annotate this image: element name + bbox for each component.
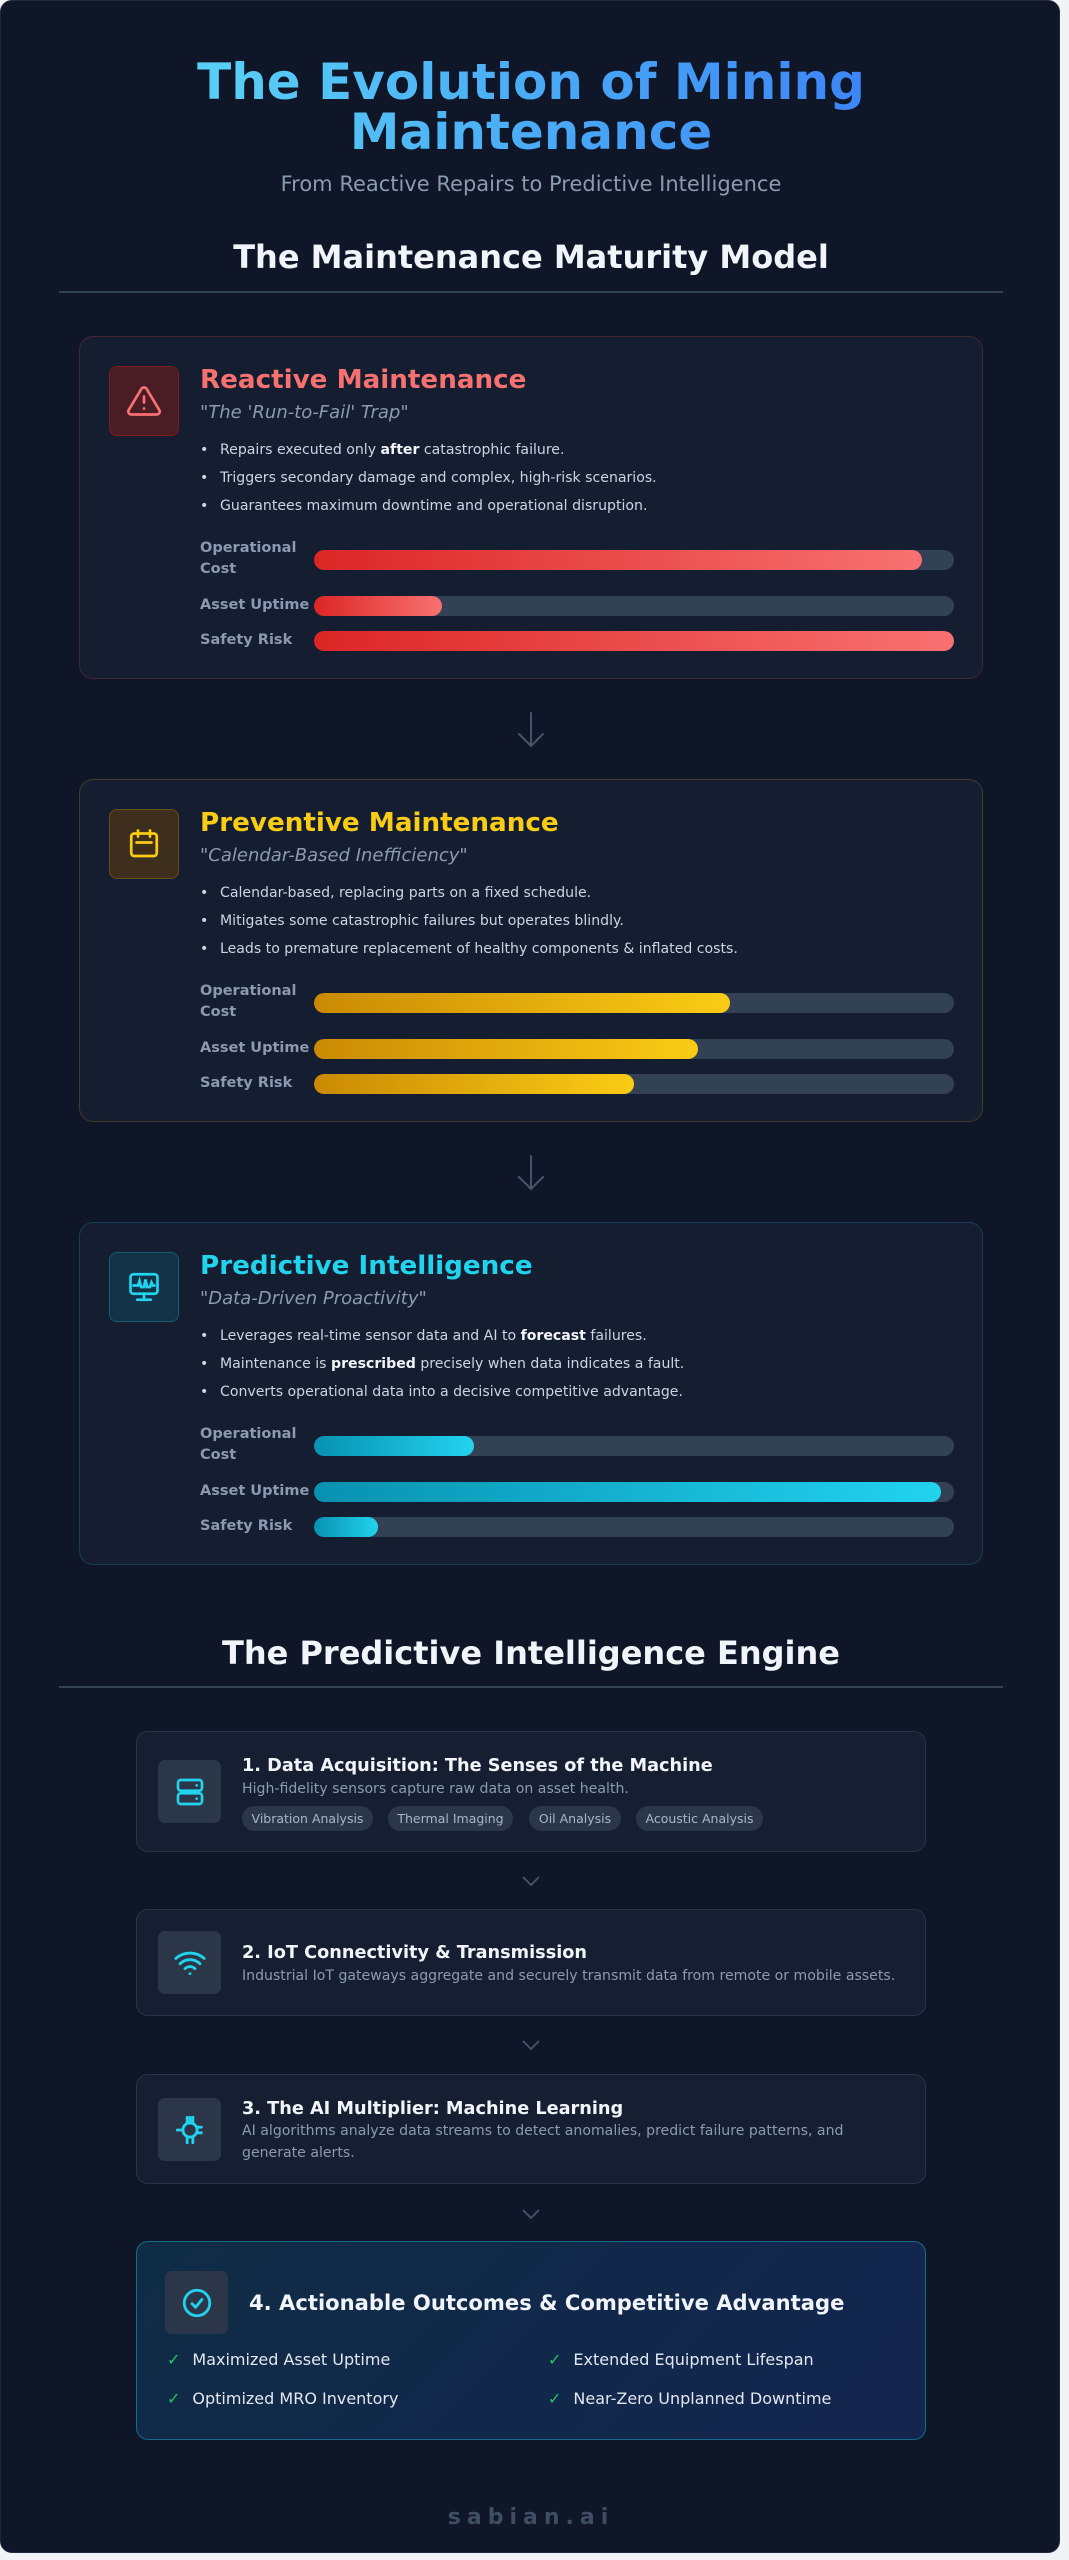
card title: Preventive Maintenance: [200, 808, 559, 838]
step text: High-fidelity sensors capture raw data on asset health.: [242, 1781, 629, 1797]
icon: chip: [158, 2098, 221, 2161]
step title: 3. The AI Multiplier: Machine Learning: [242, 2099, 623, 2119]
bullets: Mitigates some catastrophic failures but operates blindly.: [220, 913, 624, 929]
tags: Thermal Imaging: [397, 1811, 504, 1826]
bullets: Triggers secondary damage and complex, high-risk scenarios.: [220, 470, 657, 486]
bar chart: Safety Risk: [200, 632, 292, 648]
step 3: ai: [136, 2074, 926, 2184]
bar chart: Cost: [200, 561, 236, 577]
chevron: [522, 2040, 540, 2050]
step title: 1. Data Acquisition: The Senses of the Machine: [242, 1756, 713, 1776]
heading: engine: The Predictive Intelligence Engine: [222, 1634, 840, 1672]
panel: preventive maintenance: [79, 779, 983, 1122]
bar chart: [200, 1426, 954, 1537]
bar chart: [200, 540, 954, 651]
bullets: Calendar-based, replacing parts on a fixed schedule.: [220, 885, 591, 901]
tags: Acoustic Analysis: [645, 1811, 754, 1826]
card title: Predictive Intelligence: [200, 1251, 533, 1281]
bullets: Guarantees maximum downtime and operational disruption.: [220, 498, 647, 514]
arrow: [518, 1155, 544, 1190]
card subtitle: "Data-Driven Proactivity": [200, 1288, 427, 1309]
icon: warning: [109, 366, 179, 436]
step text: Industrial IoT gateways aggregate and securely transmit data from remote or mobile assets.: [242, 1968, 895, 1984]
title: The Evolution of Mining Maintenance: [197, 53, 865, 161]
step title: 4. Actionable Outcomes & Competitive Advantage: [249, 2290, 844, 2315]
icon: server: [158, 1760, 221, 1823]
bar chart: Operational: [200, 540, 296, 556]
outcomes list: ✓ Maximized Asset Uptime: [167, 2350, 390, 2369]
bar chart: Asset Uptime: [200, 1040, 309, 1056]
card subtitle: "The 'Run-to-Fail' Trap": [200, 402, 409, 423]
card title: Reactive Maintenance: [200, 365, 526, 395]
bar chart: Cost: [200, 1447, 236, 1463]
icon: wifi: [158, 1931, 221, 1994]
card subtitle: "Calendar-Based Inefficiency": [200, 845, 468, 866]
step title: 2. IoT Connectivity & Transmission: [242, 1943, 587, 1963]
tags: Oil Analysis: [539, 1811, 611, 1826]
arrow: [518, 712, 544, 748]
outcomes list: [167, 2350, 831, 2408]
bar chart: Asset Uptime: [200, 597, 309, 613]
bullets: [202, 885, 738, 957]
bullets: Leverages real-time sensor data and AI to forecast failures.: [220, 1328, 647, 1344]
subtitle: From Reactive Repairs to Predictive Intelligence: [281, 172, 781, 196]
step 4: outcomes: [136, 2241, 926, 2440]
bullets: Repairs executed only after catastrophic failure.: [220, 442, 564, 458]
bar chart: Asset Uptime: [200, 1483, 309, 1499]
bar chart: Operational: [200, 1426, 296, 1442]
icon: monitor: [109, 1252, 179, 1322]
step 1: data acquisition: [136, 1731, 926, 1852]
bar chart: Operational: [200, 983, 296, 999]
outcomes list: ✓ Near-Zero Unplanned Downtime: [548, 2389, 831, 2408]
tags: Vibration Analysis: [252, 1811, 363, 1826]
panel: predictive intelligence: [79, 1222, 983, 1565]
outcomes list: ✓ Extended Equipment Lifespan: [548, 2350, 814, 2369]
bullets: Leads to premature replacement of healthy components & inflated costs.: [220, 941, 738, 957]
step 2: iot: [136, 1909, 926, 2016]
step text: AI algorithms analyze data streams to detect anomalies, predict failure patterns, and generate alerts.: [242, 2123, 843, 2161]
bar chart: Cost: [200, 1004, 236, 1020]
panel: reactive maintenance: [79, 336, 983, 679]
bullets: Maintenance is prescribed precisely when data indicates a fault.: [220, 1356, 684, 1372]
heading: maturity model: The Maintenance Maturity Model: [233, 238, 829, 276]
bar chart: [200, 983, 954, 1094]
chevron: [522, 2210, 540, 2219]
outcomes list: ✓ Optimized MRO Inventory: [167, 2389, 398, 2408]
footer: brand: sabian.ai: [448, 2505, 614, 2530]
bullets: [202, 442, 657, 514]
bullets: Converts operational data into a decisive competitive advantage.: [220, 1384, 683, 1400]
bar chart: Safety Risk: [200, 1075, 292, 1091]
tags: [242, 1806, 763, 1831]
icon: check circle: [165, 2271, 228, 2334]
bar chart: Safety Risk: [200, 1518, 292, 1534]
icon: calendar: [109, 809, 179, 879]
chevron: [522, 1876, 540, 1886]
bullets: [202, 1328, 684, 1400]
